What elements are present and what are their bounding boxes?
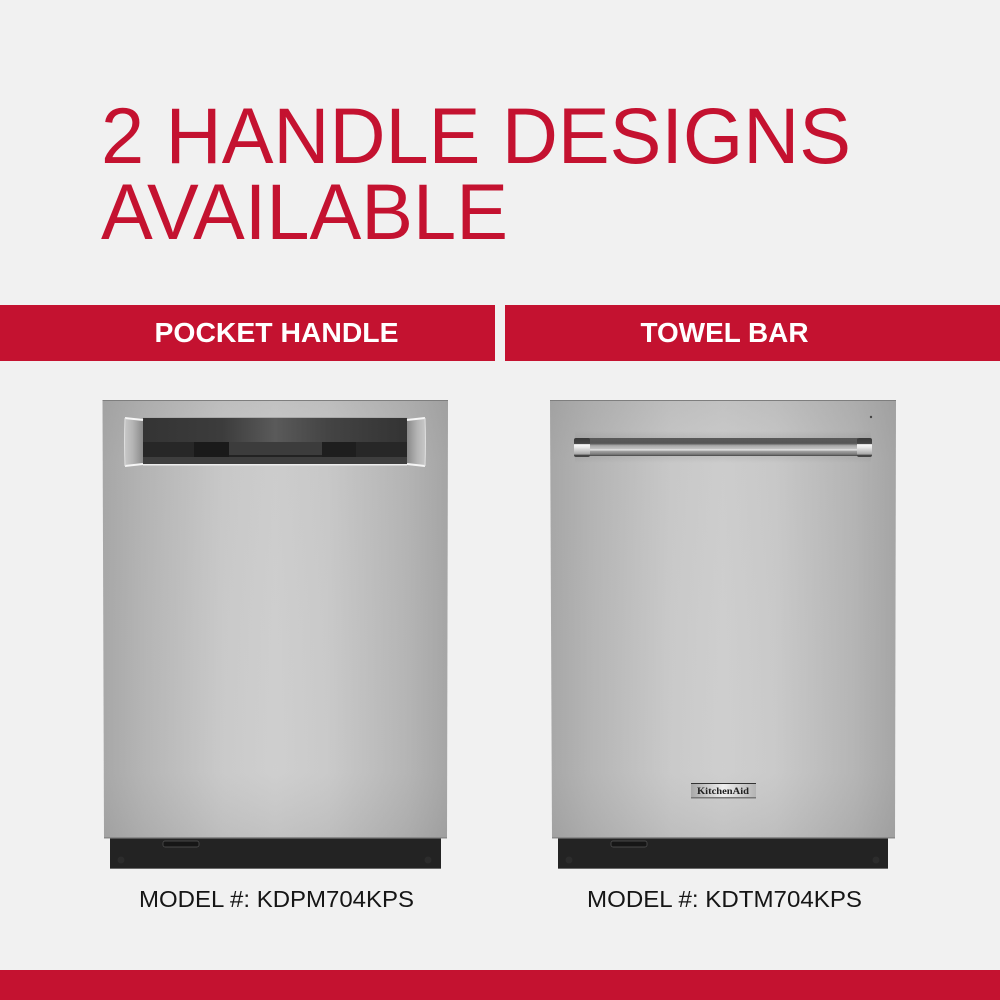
header band: pocket handle	[0, 305, 495, 361]
KitchenAid badge	[691, 783, 756, 798]
status light	[870, 416, 872, 418]
footer band	[0, 970, 1000, 1000]
dishwasher: pocket handle	[102, 400, 448, 869]
toe kick	[558, 838, 888, 869]
toe kick	[110, 838, 441, 869]
header band: towel bar: TOWEL BAR	[640, 317, 809, 348]
header band: towel bar	[505, 305, 1000, 361]
pocket handle recess	[124, 417, 426, 466]
door panel	[102, 400, 448, 838]
door panel	[550, 400, 896, 838]
KitchenAid badge: KitchenAid	[697, 786, 749, 796]
title	[101, 91, 851, 256]
header band: pocket handle: POCKET HANDLE	[154, 317, 398, 348]
dishwasher: towel bar	[550, 400, 896, 869]
model number: pocket handle: MODEL #: KDPM704KPS	[139, 886, 414, 912]
model number: towel bar: MODEL #: KDTM704KPS	[587, 886, 862, 912]
towel bar handle	[574, 431, 872, 463]
title: 2 HANDLE DESIGNS	[101, 91, 851, 180]
title: AVAILABLE	[101, 167, 508, 256]
